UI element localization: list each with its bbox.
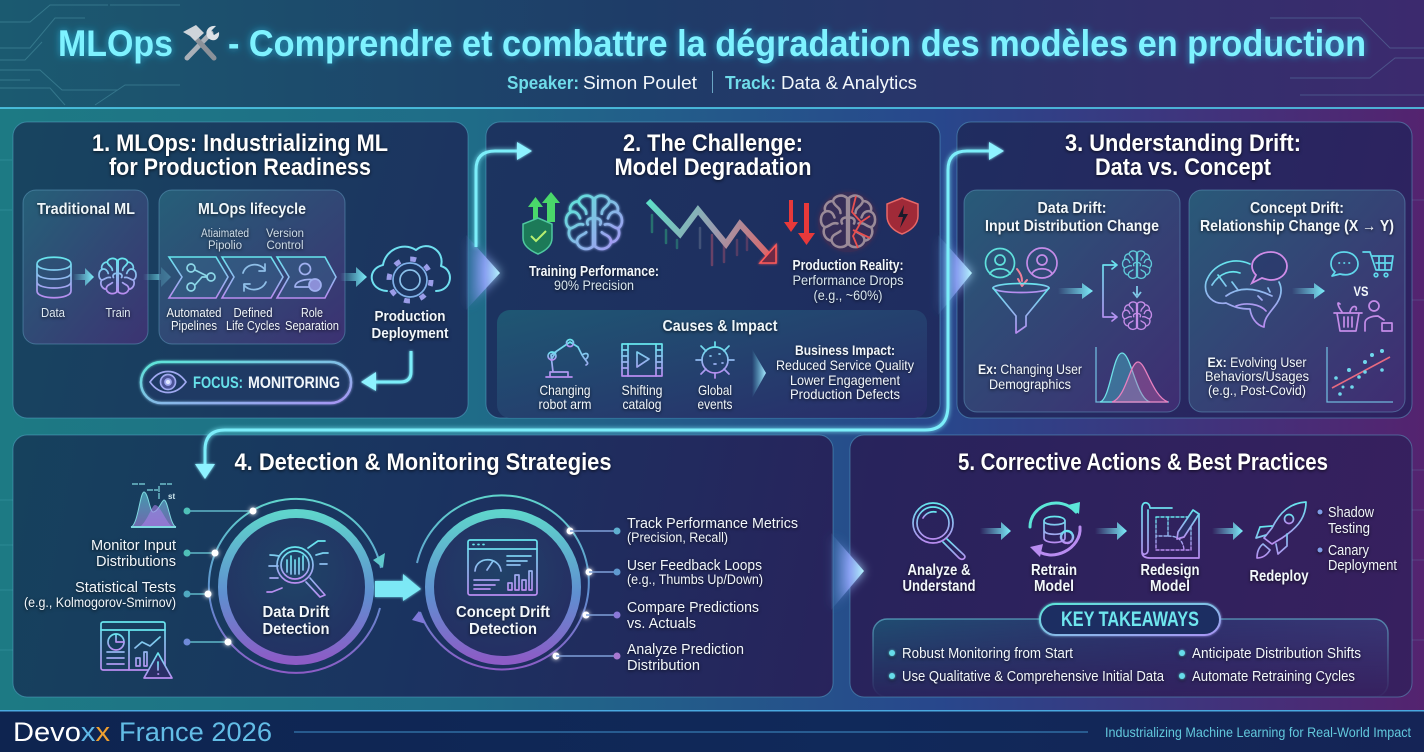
arrow [1095,522,1127,540]
panel 3: understanding drift [957,122,1412,418]
chevron: automated pipelines [169,257,228,298]
chart: scatter with regression [1327,347,1393,402]
label: retrain: Retrain [1031,562,1077,579]
icon: damaged brain [818,192,878,252]
arrow [1058,283,1093,299]
sub-panel: MLOps lifecycle: Automated [166,305,222,320]
label: analyze [902,562,976,595]
icon: magnifier [913,503,965,559]
label: concept drift detection [456,604,551,638]
text: performance metrics list [627,515,798,674]
sub-panel: MLOps lifecycle: Pipolio [208,240,242,252]
text: performance metrics list: (e.g., Thumbs Up/Down) [627,572,763,587]
text: performance metrics list: Compare Predictions [627,599,759,616]
header band [0,0,1424,108]
icon: rocket [1256,502,1306,558]
text: France 2026: France 2026 [119,717,272,747]
sub-panel: MLOps lifecycle: Life Cycles [226,318,280,333]
list: takeaways: Use Qualitative & Comprehensive Initial Data [902,669,1165,685]
text: concept drift example: Ex: Evolving User [1208,354,1307,370]
icon: green arrows and shield [523,192,560,254]
arrow [73,268,94,286]
text: business impact: Lower Engagement [790,372,900,388]
icon: cloud with gear [372,246,450,301]
heading 3 [1065,130,1301,181]
text: training performance: Training Performance: [529,264,659,280]
title: MLOps [58,23,173,64]
list: takeaways: Robust Monitoring from Start [902,646,1073,662]
footer band [0,710,1424,752]
sub-panel: MLOps lifecycle: Separation [285,318,339,333]
sub-panel: concept drift: Concept Drift: [1250,200,1344,217]
text: concept drift example: Behaviors/Usages [1205,368,1309,384]
sub-panel: causes and impact: catalog [622,396,662,412]
diagram: data drift ring [204,499,385,673]
subtitle: speaker and track: Data & Analytics [781,72,917,93]
heading 1: for Production Readiness [109,154,371,181]
label: data drift detection: Data Drift [262,604,330,621]
arrow down [1133,286,1141,297]
sub-panel: causes and impact [497,310,927,418]
arrow: panel 1 to panel 2 [476,142,532,247]
label: concept drift detection: Concept Drift [456,604,551,621]
text: concept drift example: (e.g., Post-Covid) [1208,382,1306,398]
sub-panel: data drift: Input Distribution Change [985,218,1159,235]
icon: retrain cycle [1030,502,1080,557]
text: performance metrics list: Distribution [627,657,700,674]
label: analyze: Understand [902,578,976,595]
list: deployment strategies: Shadow [1328,505,1374,521]
logo: Devoxx: Devoxx [13,717,111,747]
subtitle: speaker and track: Speaker: [507,72,579,93]
heading 1 [92,130,388,181]
arrow to lifecycle [143,267,171,287]
label: production deployment [372,308,448,342]
chart: distribution shift [1096,347,1169,402]
label: analyze: Analyze & [908,562,970,579]
label: redesign: Model [1150,578,1190,595]
pill: focus monitoring [141,362,351,403]
sub-panel: causes and impact: Shifting [622,382,662,398]
text: data drift example: Demographics [989,376,1071,392]
text: business impact: Business Impact: [795,342,895,358]
text: business impact [776,342,914,402]
text: production reality: Production Reality: [792,258,904,274]
arrow [1292,283,1325,299]
list: deployment strategies: Canary [1328,543,1370,559]
text: production reality [792,258,904,303]
heading 2 [614,130,812,181]
text: vs: VS [1354,283,1368,299]
icon: distribution peaks: st [168,492,175,501]
chevron connector: panel 2 to 3 [938,235,972,315]
text: statistical tests: (e.g., Kolmogorov-Smirnov) [24,595,176,610]
icon: database [37,257,71,298]
text: training performance: 90% Precision [554,277,634,293]
label: data drift detection [262,604,330,638]
icon: chat bubble [1331,252,1358,276]
text: training performance [529,264,659,293]
icon: brain bottom [1123,302,1151,329]
text: business impact: Reduced Service Quality [776,357,914,373]
text: production reality: Performance Drops [792,272,904,288]
panel 1: MLOps [13,122,468,418]
label: data drift detection: Detection [262,621,330,638]
icon: person with bag [1365,301,1392,331]
label: retrain [1031,562,1077,595]
icon: red down arrows [784,200,815,245]
sub-panel: causes and impact: Changing [540,382,590,398]
chevron [752,349,766,398]
heading 1: 1. MLOps: Industrializing ML [92,130,388,157]
sub-panel: causes and impact: Global [698,382,732,398]
icon: healthy brain [566,196,622,249]
label: production deployment: Deployment [372,325,448,342]
text: monitor input distributions: Monitor Input [91,537,177,554]
arrow to production [340,267,367,287]
sub-panel: MLOps lifecycle [159,190,345,344]
sub-panel: MLOps lifecycle: Control [266,240,304,252]
text: data drift example [978,361,1082,392]
sub-panel: traditional ML: Data [41,305,66,320]
text: statistical tests: Statistical Tests [75,579,176,596]
title: - Comprendre et combattre la dégradation des modèles en production [228,23,1366,64]
icon: speech bubble [1252,252,1287,283]
icon: robot arm [546,340,588,377]
big arrow between rings [375,574,421,601]
icon: magnifier with data [267,541,328,597]
icon: user groups [986,248,1057,286]
icon: red shield [887,198,918,234]
text: data drift example: Ex: Changing User [978,361,1082,377]
sub-panel: traditional ML: Traditional ML [37,201,135,218]
chevron: role separation [277,257,336,298]
pill: focus monitoring: FOCUS: [193,373,243,392]
list: deployment strategies [1318,505,1397,574]
sub-panel: traditional ML [23,190,148,344]
pill: key takeaways: KEY TAKEAWAYS [1061,608,1199,631]
heading 5: 5. Corrective Actions & Best Practices [958,449,1328,476]
list: takeaways: Anticipate Distribution Shifts [1192,646,1361,662]
diagram: concept drift ring [412,495,592,669]
sub-panel: traditional ML: Train [106,305,130,320]
icon: shopping cart [1363,252,1393,277]
sub-panel: MLOps lifecycle: Atiaimated [201,228,249,240]
arrow [1212,522,1243,540]
label: redesign [1140,562,1200,595]
text: production reality: (e.g., ~60%) [814,287,882,303]
sub-panel: MLOps lifecycle: Defined [234,305,272,320]
sub-panel: MLOps lifecycle: Version [266,228,304,240]
icon: trash bin [1334,303,1362,331]
sub-panel: concept drift [1189,190,1405,412]
panel 2: the challenge [486,122,940,418]
heading 2: Model Degradation [614,154,812,181]
heading 3: 3. Understanding Drift: [1065,130,1301,157]
list: deployment strategies: Deployment [1328,558,1397,574]
pill: key takeaways [1040,604,1220,635]
icon: routing bracket [1103,261,1117,321]
arrow: panel 2 to panel 3 and panel 4 [195,142,1004,479]
subtitle: speaker and track: Simon Poulet [583,72,697,93]
heading 3: Data vs. Concept [1095,154,1271,181]
label: redesign: Redesign [1140,562,1200,579]
icon: virus [696,342,734,378]
icon: eye [150,372,186,392]
sub-panel: MLOps lifecycle: Pipelines [171,318,217,333]
icon: funnel [993,284,1049,333]
chevron connector: panel 1 to 2 [466,235,500,310]
panel 5: corrective actions [850,435,1412,697]
heading 2: 2. The Challenge: [623,130,803,157]
list: takeaways: Automate Retraining Cycles [1192,669,1355,685]
text: concept drift example [1205,354,1309,398]
text: performance metrics list: Analyze Prediction [627,641,744,658]
box: key takeaways [873,604,1388,697]
sub-panel: concept drift: Relationship Change (X → Y) [1200,218,1394,235]
label: production deployment: Production [374,308,446,325]
arrow [980,522,1011,540]
icon: distribution peaks [131,484,176,527]
text: monitor input distributions: Distributions [96,553,176,570]
heading 4: 4. Detection & Monitoring Strategies [234,449,612,476]
sub-panel: causes and impact: Causes & Impact [662,318,778,335]
icon: film strip [622,344,662,376]
label: retrain: Model [1034,578,1074,595]
sub-panel: data drift [964,190,1180,412]
sub-panel: causes and impact: events [698,396,732,412]
label: concept drift detection: Detection [469,621,537,638]
text: performance metrics list: Track Performance Metrics [627,515,798,532]
icon: hammer and wrench [183,25,219,58]
icon: monitoring window [468,540,537,595]
sub-panel: MLOps lifecycle: Role [301,305,323,320]
subtitle: speaker and track: Track: [725,72,776,93]
text: performance metrics list: (Precision, Recall) [627,530,728,545]
pill: focus monitoring: MONITORING [248,373,340,392]
chevron connector: panel 4 to 5 [831,533,864,610]
connectors: right bullets [556,528,620,660]
panel 4: detection and monitoring [13,435,833,697]
arrow: deployment to monitoring [361,351,411,391]
text: performance metrics list: vs. Actuals [627,615,696,632]
sub-panel: MLOps lifecycle: MLOps lifecycle [198,201,306,218]
icon: blueprint [1142,503,1199,558]
text: business impact: Production Defects [790,386,900,402]
icon: dashboard with warning [101,622,172,678]
label: redeploy: Redeploy [1250,568,1309,585]
text: statistical tests [24,579,176,610]
list: takeaways [889,646,1361,685]
text: performance metrics list: User Feedback Loops [627,557,762,574]
chevron: defined life cycles [222,257,283,298]
chart: falling trend arrow [648,201,776,265]
list: deployment strategies: Testing [1328,521,1370,537]
subtitle: speaker and track [507,71,917,93]
sub-panel: causes and impact: robot arm [538,396,592,412]
connectors: left bullets [184,508,253,646]
text: monitor input distributions [91,537,177,570]
sub-panel: data drift: Data Drift: [1038,200,1106,217]
icon: brain top [1123,251,1151,278]
icon: brain [99,258,136,294]
icon: side brain [1206,261,1281,327]
